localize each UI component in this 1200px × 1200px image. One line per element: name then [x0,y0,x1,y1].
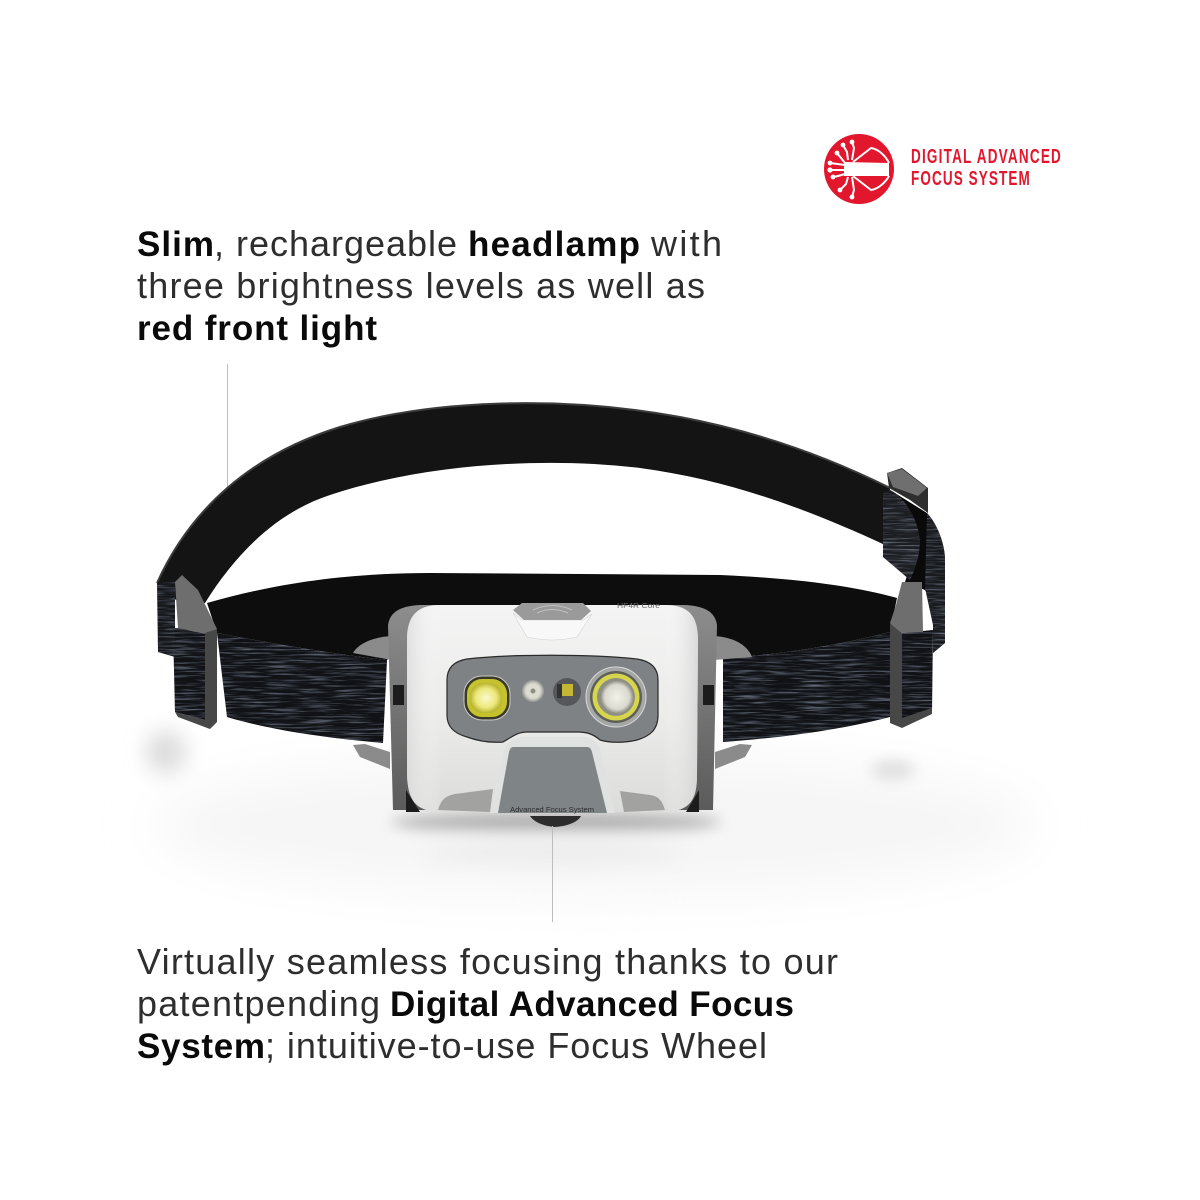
logo text: FOCUS SYSTEM [911,166,1030,190]
focus wheel [530,816,581,827]
red led sensor [553,678,581,706]
strap clip top right [887,468,928,513]
right lens [586,667,646,727]
right buckle [890,582,932,728]
text block: slim headlamp: three brightness levels as well as [137,265,705,306]
text block: focusing: System [137,1027,265,1066]
white lamp body [407,605,698,812]
text block: focusing: Virtually seamless focusing thanks to our [137,941,838,982]
top button [513,603,592,640]
text block: slim headlamp: headlamp [468,225,640,264]
text block: focusing: patentpending [137,983,380,1024]
lamp housing [388,605,717,810]
logo text [911,144,1061,190]
text block: slim headlamp [137,223,722,348]
back strap [157,403,897,660]
floor reflection and shadow [146,730,1035,897]
left buckle [175,575,217,729]
text block: slim headlamp: Slim [137,225,214,264]
headlamp [140,403,960,827]
front strap with melange texture [157,490,945,743]
leader line bottom [552,826,553,922]
slider label: Advanced Focus System [510,805,594,814]
text block: focusing: ; intuitive-to-use Focus Wheel [265,1025,767,1066]
logo badge [824,134,894,204]
dark corner inserts [393,685,714,812]
model label: HF4R Core [617,603,660,610]
lamp arms [353,636,752,769]
small led [522,680,544,702]
lens panel [447,655,658,742]
focus slider panel [490,737,615,814]
logo text: DIGITAL ADVANCED [911,144,1061,168]
text block: slim headlamp: red front light [137,309,377,348]
text block: focusing: Digital Advanced Focus [390,985,794,1024]
logo: digital advanced focus system [824,134,1061,204]
text block: slim headlamp: , rechargeable [214,223,457,264]
text block: slim headlamp: with [650,223,722,264]
leader line top [227,364,228,496]
text block: focusing [137,941,838,1066]
side wedges [438,789,665,812]
left lens [464,676,510,720]
